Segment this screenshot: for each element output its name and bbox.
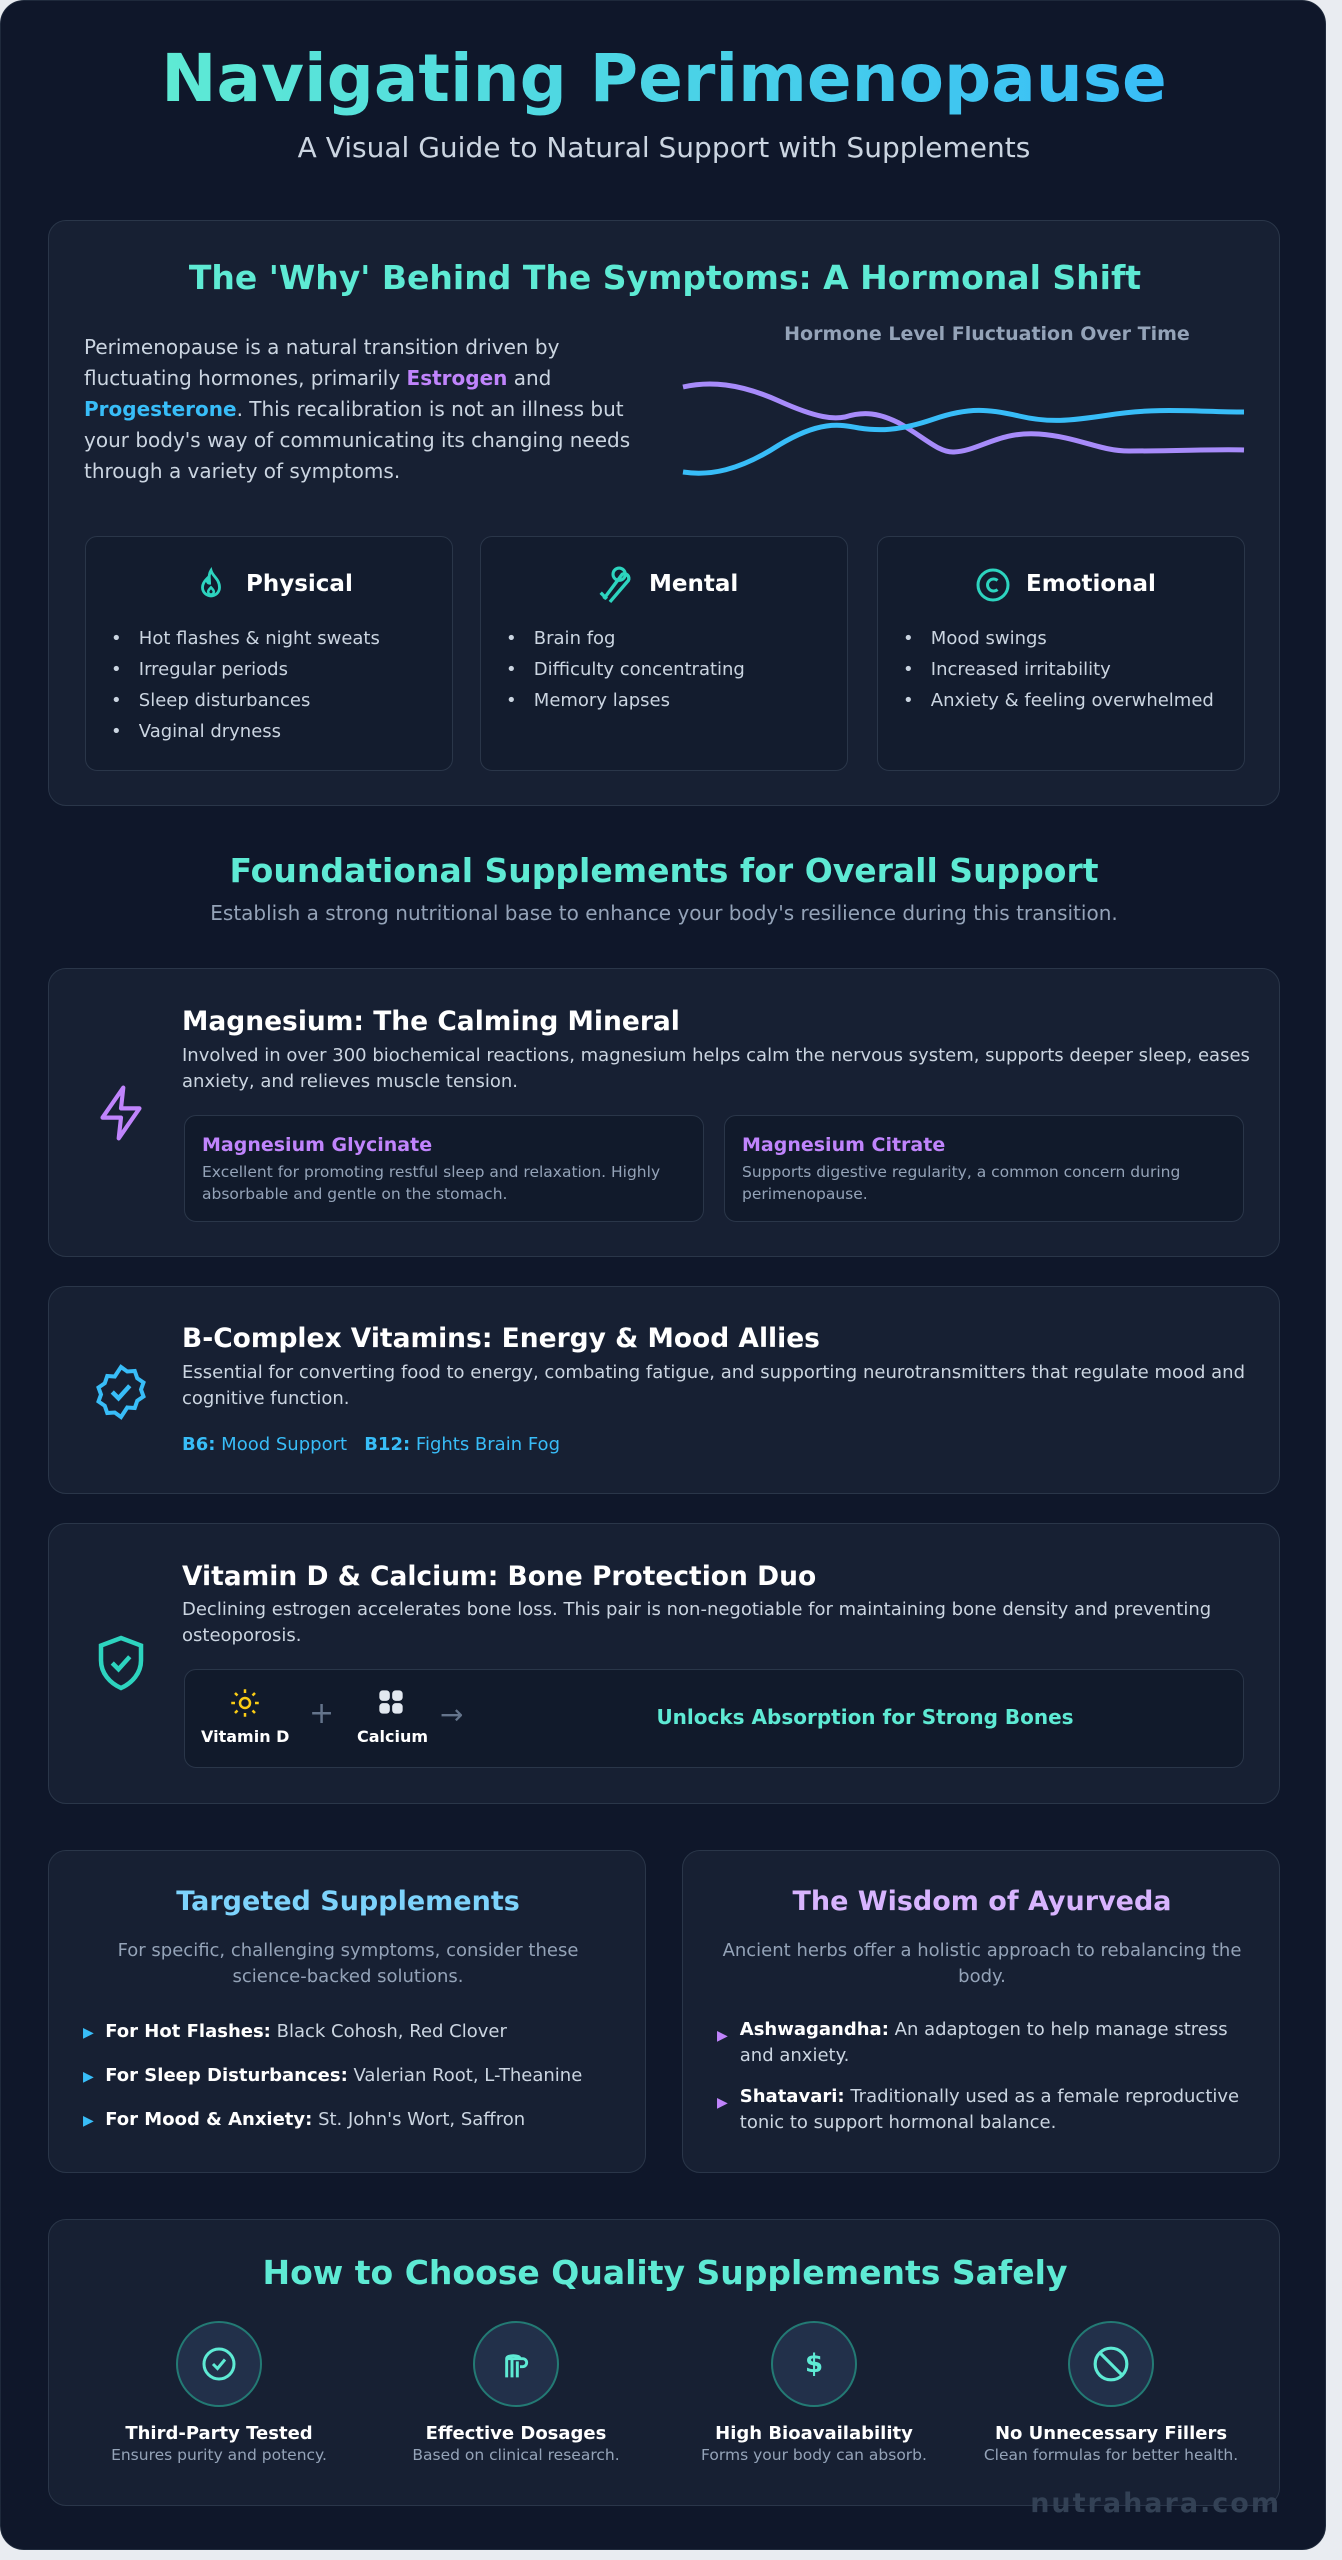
tags: b6 b12: B6: Mood Support B12: Fights Brain Fog <box>182 1434 560 1455</box>
item: bioavailability <box>701 2321 927 2464</box>
icon: ban <box>1068 2321 1154 2407</box>
panel: ayurveda <box>682 1850 1280 2173</box>
heading: magnesium: Magnesium: The Calming Mineral <box>182 1006 680 1037</box>
list: mental <box>506 628 745 711</box>
panel: hormonal shift <box>48 220 1280 806</box>
box: glycinate: Excellent for promoting restful sleep and relaxation. Highly absorbable and gentle on the stomach. <box>202 1163 660 1203</box>
text block: intro: Perimenopause is a natural transition driven by fluctuating hormones, primarily Estrogen and Progesterone. This recalibration is not an illness but your body's way of communicating its changing needs through a variety of symptoms. <box>84 335 630 483</box>
text: ayurveda: Ancient herbs offer a holistic approach to rebalancing the body. <box>723 1940 1241 1987</box>
item: dosages <box>412 2321 620 2464</box>
list: mental: • Difficulty concentrating <box>506 659 745 680</box>
heading: vitamin d: Vitamin D & Calcium: Bone Protection Duo <box>182 1561 816 1592</box>
callout: absorption: Unlocks Absorption for Strong Bones <box>656 1705 1074 1729</box>
watermark: nutrahara.com <box>1030 2488 1281 2519</box>
box: citrate: Magnesium Citrate <box>742 1134 945 1156</box>
box: absorption diagram <box>184 1669 1244 1768</box>
heading: physical: Physical <box>246 571 353 597</box>
panel: b-complex <box>48 1286 1280 1494</box>
box: glycinate <box>184 1115 704 1222</box>
item: third-party <box>111 2321 327 2464</box>
heading: mental: Mental <box>649 571 738 597</box>
heading: targeted: Targeted Supplements <box>176 1886 520 1917</box>
heading: foundational: Foundational Supplements for Overall Support <box>229 851 1099 890</box>
icon: shield <box>98 1636 144 1690</box>
icon: sun <box>231 1689 259 1717</box>
text: vitamin d: Declining estrogen accelerates bone loss. This pair is non-negotiable for maintaining bone density and preventing osteoporosis. <box>182 1599 1211 1646</box>
list: targeted: ▶ For Hot Flashes: Black Cohosh, Red Clover <box>83 2021 507 2042</box>
list: physical: • Hot flashes & night sweats <box>111 628 380 649</box>
icon: dosage <box>473 2321 559 2407</box>
list: ayurveda: Ashwagandha: An adaptogen to help manage stress and anxiety. <box>740 2019 1228 2066</box>
list: targeted <box>83 2021 582 2130</box>
box: citrate <box>724 1115 1244 1222</box>
heading: quality: How to Choose Quality Supplements Safely <box>263 2253 1067 2292</box>
item: no fillers <box>984 2321 1238 2464</box>
item: bioavailability: Forms your body can absorb. <box>701 2446 927 2464</box>
box: absorption diagram: → <box>440 1698 463 1731</box>
heading: emotional: Emotional <box>1026 571 1156 597</box>
box: absorption diagram: + <box>309 1696 334 1731</box>
box: glycinate: Magnesium Glycinate <box>202 1134 432 1156</box>
icon: emotion circle <box>976 568 1010 602</box>
item: third-party: Third-Party Tested <box>125 2423 313 2444</box>
list: emotional: • Anxiety & feeling overwhelmed <box>903 690 1214 711</box>
list: emotional <box>903 628 1214 711</box>
text: targeted: For specific, challenging symptoms, consider these science-backed solutions. <box>118 1940 578 1987</box>
icon: lightning <box>100 1086 142 1140</box>
list: targeted: ▶ For Mood & Anxiety: St. John's Wort, Saffron <box>83 2109 525 2130</box>
panel: choose quality <box>48 2219 1280 2506</box>
heading: why: The 'Why' Behind The Symptoms: A Hormonal Shift <box>189 258 1141 297</box>
list: physical: • Irregular periods <box>111 659 288 680</box>
list: mental: • Brain fog <box>506 628 615 649</box>
list: ayurveda: Shatavari: Traditionally used as a female reproductive tonic to support hormonal balance. <box>740 2086 1239 2133</box>
subtitle: A Visual Guide to Natural Support with Supplements <box>298 131 1030 164</box>
list: targeted: ▶ For Sleep Disturbances: Valerian Root, L-Theanine <box>83 2065 582 2086</box>
icon: pill <box>600 566 630 603</box>
icon: check circle <box>176 2321 262 2407</box>
text: b-complex: Essential for converting food to energy, combating fatigue, and supporting neurotransmitters that regulate mood and cognitive function. <box>182 1362 1245 1409</box>
title: Navigating Perimenopause <box>161 40 1167 117</box>
item: no fillers: No Unnecessary Fillers <box>995 2423 1227 2444</box>
box: absorption diagram: Vitamin D <box>201 1727 289 1746</box>
chart: hormone fluctuation: Hormone Level Fluctuation Over Time <box>784 323 1190 345</box>
card: physical <box>85 536 453 771</box>
list: ayurveda: ▶ <box>717 2095 728 2111</box>
list: ayurveda: ▶ <box>717 2028 728 2044</box>
item: no fillers: Clean formulas for better health. <box>984 2446 1238 2464</box>
heading: b-complex: B-Complex Vitamins: Energy & Mood Allies <box>182 1323 820 1354</box>
box: absorption diagram: Calcium <box>357 1727 428 1746</box>
icon: dollar <box>771 2321 857 2407</box>
icon: flame <box>201 567 221 598</box>
list: physical: • Sleep disturbances <box>111 690 310 711</box>
panel: vitamin d calcium <box>48 1523 1280 1804</box>
icon: badge check <box>96 1364 146 1420</box>
chart: hormone fluctuation <box>682 323 1244 476</box>
icon: calcium grid <box>379 1690 403 1714</box>
panel: targeted supplements <box>48 1850 646 2173</box>
subtitle: foundational: Establish a strong nutritional base to enhance your body's resilience during this transition. <box>210 901 1118 925</box>
list: mental: • Memory lapses <box>506 690 670 711</box>
icon: dollar: $ <box>805 2349 823 2379</box>
box: citrate: Supports digestive regularity, a common concern during perimenopause. <box>742 1163 1180 1203</box>
item: dosages: Effective Dosages <box>426 2423 606 2444</box>
list: emotional: • Increased irritability <box>903 659 1111 680</box>
list: physical <box>111 628 380 742</box>
card: mental <box>480 536 848 771</box>
list: physical: • Vaginal dryness <box>111 721 281 742</box>
list: ayurveda <box>717 2019 1239 2133</box>
item: third-party: Ensures purity and potency. <box>111 2446 327 2464</box>
item: bioavailability: High Bioavailability <box>715 2423 913 2444</box>
item: dosages: Based on clinical research. <box>412 2446 620 2464</box>
panel: magnesium <box>48 968 1280 1257</box>
list: emotional: • Mood swings <box>903 628 1047 649</box>
text: magnesium: Involved in over 300 biochemical reactions, magnesium helps calm the nervous system, supports deeper sleep, eases anxiety, and relieves muscle tension. <box>182 1045 1250 1092</box>
card: emotional <box>877 536 1245 771</box>
heading: ayurveda: The Wisdom of Ayurveda <box>792 1886 1172 1917</box>
